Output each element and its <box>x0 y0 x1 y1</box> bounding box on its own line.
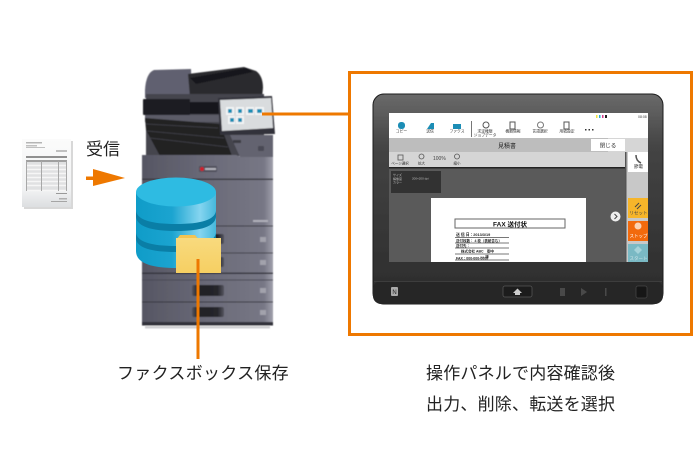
screen: ページ選択 <box>391 160 409 166</box>
screen: FAX 送付状 <box>493 220 527 228</box>
tray labels <box>260 237 266 242</box>
toolbar <box>389 152 625 167</box>
operation panel device <box>373 94 663 304</box>
screen: 用紙設定 <box>559 128 575 134</box>
screen <box>389 113 648 268</box>
screen: ジョブデータ <box>474 132 497 138</box>
printer <box>142 67 275 328</box>
fax page preview <box>431 198 586 268</box>
connector line: panel to frame <box>262 112 349 116</box>
screen: ファクス <box>449 128 465 134</box>
screen: 見積書 <box>498 142 516 150</box>
screen: 言語選択 <box>532 128 548 134</box>
screen: 節電 <box>634 163 643 170</box>
middle body behind trays <box>146 94 264 156</box>
title bar <box>389 138 608 152</box>
heading: receive: 受信 <box>86 140 120 159</box>
operation panel device: N <box>392 290 397 296</box>
icon: received document <box>22 139 73 209</box>
screen: スタート <box>630 255 648 262</box>
screen: 縮小 <box>454 160 461 166</box>
tray handles <box>192 234 224 244</box>
right column <box>625 152 648 262</box>
document output <box>143 99 190 115</box>
document feeder <box>188 67 263 97</box>
screen: 閉じる <box>600 142 616 150</box>
caption: panel instructions: 出力、削除、転送を選択 <box>426 395 615 414</box>
screen: 解像度 <box>393 176 402 181</box>
screen: サイズ <box>393 172 402 177</box>
screen: 株式会社 ABC 御中 <box>461 248 495 254</box>
top menu <box>389 113 648 138</box>
screen: 求定権限 <box>477 128 493 134</box>
screen: 拡大 <box>418 160 426 166</box>
arrow: receive <box>86 169 125 186</box>
screen: 送信 <box>426 128 434 134</box>
scanner top <box>145 69 192 98</box>
screen: 100% <box>433 156 446 162</box>
screen: ストップ <box>630 234 648 240</box>
screen: 送付枚数： 4 枚（表紙含む） <box>456 238 502 243</box>
folder icon <box>176 235 221 273</box>
next arrow <box>610 212 620 222</box>
screen: FAX：000-000-0000 <box>456 256 488 260</box>
screen: 機器情報 <box>505 128 521 134</box>
screen: 送 信 日：2013/3/19 <box>456 232 490 237</box>
screen: ○○ 様 <box>480 254 489 259</box>
feet <box>145 326 270 328</box>
connector line: folder to label <box>196 259 200 359</box>
screen: 送付先： <box>456 243 470 248</box>
screen: リセット <box>630 210 648 216</box>
caption: panel instructions: 操作パネルで内容確認後 <box>426 364 615 383</box>
info box <box>391 171 441 193</box>
database cylinder <box>136 178 216 268</box>
logo <box>199 166 217 172</box>
screen: カラー <box>393 180 402 184</box>
printer panel <box>218 96 275 135</box>
screen: コピー <box>396 128 407 134</box>
screen: 200×200 dpi <box>412 176 429 180</box>
hardware buttons <box>391 287 398 296</box>
main body <box>142 155 273 325</box>
screen: 08:08 <box>638 115 647 119</box>
caption: panel instructions <box>426 364 615 414</box>
panel frame <box>350 72 692 334</box>
label: fax box storage: ファクスボックス保存 <box>117 364 289 383</box>
